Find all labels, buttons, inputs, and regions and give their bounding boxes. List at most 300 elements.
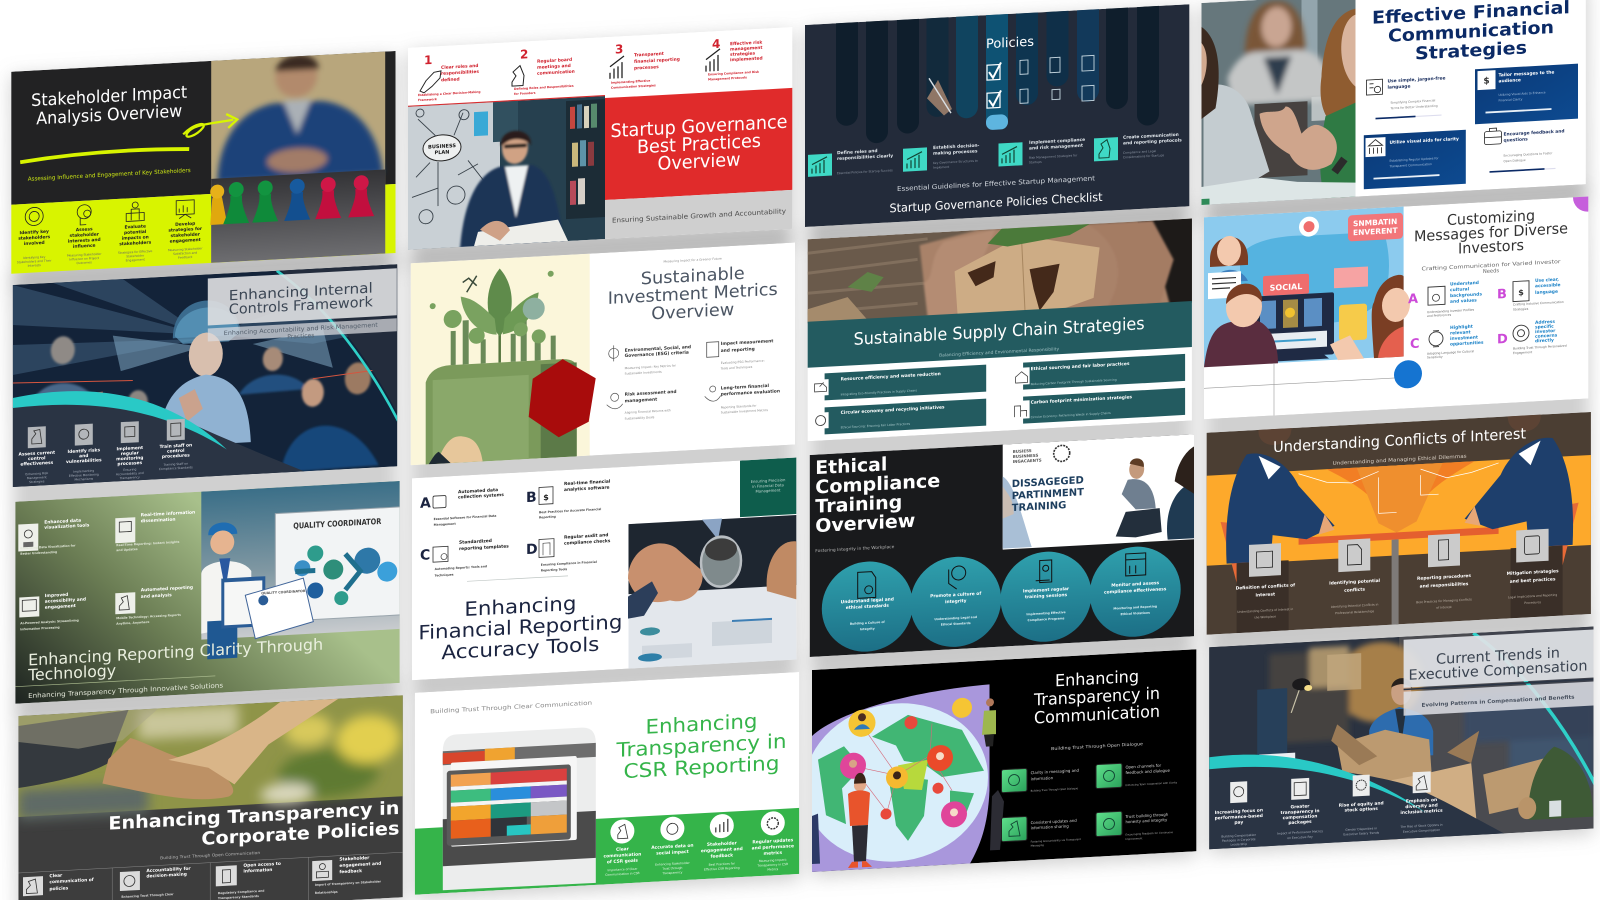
photo: founder with business plan: PLAN	[435, 149, 449, 156]
item: evaluate impacts	[118, 201, 153, 263]
item: identifying: conflicts	[1344, 587, 1365, 594]
item A	[1408, 280, 1482, 319]
item: open access: information	[243, 867, 272, 875]
panel: Startup Governance	[408, 27, 793, 252]
item: data visualization: Enhanced data	[44, 518, 81, 526]
item: monitoring: Accountability and	[116, 471, 144, 476]
item: mitigation: Procedures	[1524, 600, 1541, 605]
item: assess interests: Influence on Project	[69, 256, 100, 262]
item: trust building	[1096, 808, 1174, 843]
title: Training	[815, 492, 902, 518]
item: accessibility: Improved	[45, 592, 68, 599]
item C	[420, 537, 509, 578]
item: automated reporting: and analysis	[141, 592, 172, 600]
panel: Effective Financial Communication	[1202, 0, 1586, 205]
item: assess controls: Management	[27, 475, 47, 480]
item: stakeholder engagement: Effective CSR Reporting	[704, 866, 740, 872]
item: stakeholder engagement	[312, 854, 382, 895]
card: visual aids: Transparent Communication	[1389, 162, 1432, 168]
item: risk assessment: Risk assessment and	[625, 389, 677, 398]
title: Communication	[1034, 702, 1160, 728]
title: Understanding Conflicts of Interest	[1273, 425, 1526, 456]
item: consistent updates: Consistent updates and	[1031, 818, 1077, 825]
item: real-time information	[115, 509, 195, 552]
item: performance-based pay	[1215, 780, 1263, 848]
item: plain language	[1366, 75, 1445, 120]
item: develop strategies: stakeholder	[171, 231, 201, 239]
illustration: negotiation at an orange table	[1207, 408, 1592, 635]
title: Overview	[815, 511, 915, 537]
photo strips: hand ticking policy checklist	[836, 0, 1159, 145]
item: equity options: Gender Disparities in	[1345, 826, 1377, 832]
title: Enhancing Reporting Clarity Through	[28, 635, 323, 670]
item: reporting procedures: of Interest	[1436, 605, 1453, 610]
title: Enhancing	[464, 592, 576, 621]
item: identifying: Professional Relationships	[1335, 609, 1375, 615]
item C: reporting templates	[459, 543, 509, 552]
circle: legal standards: Building a Culture of	[850, 620, 885, 626]
item: identify risks	[66, 423, 102, 482]
item: transparency in packages: transparency in	[1281, 808, 1319, 816]
item: clarity in messaging: Clarity in messaging and	[1031, 768, 1079, 775]
photo: hands holding earth box	[808, 215, 1193, 335]
item: stakeholder engagement: feedback	[710, 853, 733, 860]
item: ethical sourcing: Ethical sourcing and fair labor practices	[1031, 361, 1130, 372]
item: train staff: Train staff on	[159, 442, 192, 450]
item: ESG	[609, 341, 691, 377]
item: clear communication of CSR goals	[603, 818, 641, 877]
item: definition: Understanding Conflicts of Interest in	[1237, 607, 1293, 614]
item: long-term performance: Sustainable Investment Metrics	[721, 408, 768, 415]
item: trust building: Improvement	[1126, 836, 1142, 841]
item C: Standardized	[459, 538, 492, 546]
grid lines	[1204, 356, 1410, 419]
item: identify key stakeholders: Identifying Key	[23, 255, 46, 260]
item: transparent reporting: processes	[634, 64, 659, 71]
item: compliance	[998, 137, 1085, 167]
subtitle: Ensuring Sustainable Growth and Accountability	[612, 207, 786, 225]
item: develop strategies: Feedback	[178, 255, 193, 260]
panel: Enhancing Transparency in CSR Reporting	[415, 672, 800, 895]
item: clear communication	[23, 871, 94, 896]
item: automated reporting: Automated reporting	[141, 585, 193, 593]
item: consistent updates: information sharing	[1031, 823, 1069, 830]
item: assess controls: Enhancing Risk	[25, 471, 48, 476]
item: automated reporting: Mobile Technology: Accessing Reports	[116, 613, 181, 620]
item: assess interests	[67, 204, 102, 266]
item: real-time information: dissemination	[141, 517, 176, 524]
item: monitoring: processes	[117, 460, 143, 467]
item: assess interests: Measuring Stakeholder	[67, 252, 102, 258]
red hexagon	[529, 357, 596, 439]
item: communication protocols: Considerations for Startups	[1123, 153, 1164, 159]
item: trust building: honesty and integrity	[1126, 817, 1168, 824]
item: monitoring: Ensuring	[123, 467, 136, 472]
item: monitoring: monitoring	[116, 455, 143, 462]
photo: hand with magnifying glass over reports	[628, 514, 798, 669]
item: open access: Open access to	[243, 861, 281, 869]
item: performance-based pay: Packages in Corporate	[1222, 837, 1256, 843]
item: accountability: decision-making	[146, 871, 187, 880]
item: communication protocols: Create communication	[1123, 132, 1179, 141]
item: ethical sourcing	[1014, 354, 1185, 390]
item: impact measurement: and reporting	[721, 346, 755, 354]
item: equity options: Rise of equity and	[1339, 800, 1384, 809]
item: assess controls: Assess current	[19, 450, 55, 458]
illustration: quality coordinator with certificate: QUALITY COORDINATOR	[261, 589, 306, 595]
subtitle: Needs	[1483, 268, 1499, 275]
item: decision-making: Key Governance Structures to	[933, 159, 978, 165]
panel: Stakeholder Impact Analysis	[11, 49, 396, 275]
item B: language	[1535, 289, 1558, 296]
photo: speaker at department training: TRAINING	[1012, 500, 1066, 514]
subtitle: Crafting Communication for Varied Investor	[1422, 259, 1562, 273]
item: transparency in packages: packages	[1288, 819, 1312, 826]
item: identifying: Identifying potential	[1329, 578, 1381, 587]
title panel	[1404, 630, 1594, 716]
item: risk assessment: management	[625, 397, 657, 404]
item C: investment	[1450, 335, 1478, 342]
item: risk assessment: Sustainability Goals	[625, 415, 655, 421]
item: risk management: Management Protocols	[708, 75, 747, 81]
title panel: Enhancing Internal	[229, 281, 373, 304]
item: clarity in messaging	[1002, 766, 1079, 794]
title panel: Controls Framework	[229, 294, 374, 318]
title: Analysis Overview	[36, 101, 182, 129]
illustration: quality coordinator with certificate: QUALITY COORDINATOR	[293, 517, 381, 531]
item: define roles: responsibilities clearly	[837, 153, 893, 162]
item: performance-based pay: pay	[1234, 820, 1243, 826]
item: reporting procedures: Best Practices for Managing Conflicts	[1416, 597, 1472, 604]
card: tailor messages: Tailor messages to the	[1498, 69, 1554, 78]
illustration: tablet dashboard	[443, 727, 596, 891]
brush stroke and arrow	[20, 113, 237, 162]
item: regular updates: Metrics	[767, 867, 779, 872]
item: decision-making: Establish decision-	[933, 143, 980, 151]
item: identify risks: Identify risks	[68, 447, 100, 455]
item: evaluate impacts: stakeholders	[119, 240, 152, 247]
item D: Reporting Tools	[541, 567, 567, 573]
item: circular economy: Circular economy and recycling initiatives	[841, 404, 945, 416]
title band: Sustainable Supply Chain Strategies	[854, 314, 1145, 350]
item B: B	[526, 490, 537, 506]
card: visual aids	[1364, 130, 1466, 189]
item D: D	[526, 542, 538, 558]
item D: directly	[1535, 337, 1554, 344]
title: Enhancing	[1055, 667, 1139, 690]
item: evaluate impacts: Stakeholder	[126, 253, 145, 258]
circle: monitor effectiveness: Monitoring and Reporting	[1113, 604, 1157, 611]
title: Startup Governance Policies Checklist	[890, 190, 1103, 215]
item: equity options: stock options	[1345, 806, 1378, 814]
item: develop strategies: Develop	[175, 221, 195, 228]
item D: Engagement	[1513, 350, 1533, 355]
item: accurate data: Accurate data on	[651, 843, 694, 851]
item: diversity metrics: Executive Compensation	[1403, 828, 1440, 834]
corner note: Ensuring Precision	[751, 477, 786, 484]
item: stakeholder engagement: engagement and	[339, 861, 381, 869]
item: accurate data	[651, 816, 694, 876]
item: resource efficiency: Resource efficiency and waste reduction	[841, 371, 941, 383]
item: identifying: Identifying Potential Conflicts in	[1331, 602, 1378, 609]
circle: culture of integrity: integrity	[945, 598, 967, 605]
panel: Customizing Messages	[1204, 181, 1600, 419]
item: develop strategies: engagement	[170, 237, 201, 245]
title: Strategies	[1415, 38, 1527, 64]
item: evaluate impacts: Strategies for Effective	[118, 249, 153, 255]
item: risk management: strategies	[730, 51, 756, 58]
item: risk management	[706, 35, 763, 82]
item: plain language: language	[1388, 83, 1410, 91]
item: regular updates: and performance	[752, 843, 794, 852]
photo: speaker at department training: BUSIESS	[1013, 448, 1032, 454]
item: performance-based pay: Increasing focus on	[1215, 807, 1263, 816]
item: resource efficiency: Integrating Eco-Friendly Practices in Supply Chains	[841, 388, 917, 397]
item: encourage feedback: questions	[1504, 136, 1528, 144]
illustration: connected people on a globe	[804, 684, 1004, 872]
illustration: social media team: ENVERENT	[1353, 226, 1398, 237]
item: data visualization: Better Understanding	[20, 550, 57, 556]
photo: speaker at department training	[1003, 434, 1195, 550]
item: consistent updates: Messaging	[1031, 843, 1044, 848]
title panel: Evolving Patterns in Compensation and Benefits	[1421, 695, 1574, 709]
item: monitoring: Implement	[116, 445, 143, 452]
item: trust building: Trust building through	[1125, 812, 1169, 819]
item: regular updates: metrics	[764, 850, 782, 857]
card: tailor messages	[1475, 64, 1578, 124]
item: accurate data: social impact	[656, 849, 689, 857]
title: Overview	[651, 300, 734, 324]
title panel: Current Trends in	[1436, 645, 1560, 668]
item: assess interests: influence	[73, 243, 96, 250]
item: accountability: Enhancing Trust Through Clear	[121, 892, 174, 899]
item A: backgrounds	[1450, 291, 1482, 299]
item: stakeholder engagement: feedback	[339, 868, 362, 875]
title: Best Practices	[637, 131, 761, 158]
item B: B	[1497, 287, 1507, 302]
item: clear roles	[418, 55, 480, 102]
panel: Sustainable Supply Chain	[808, 215, 1193, 441]
item: define roles	[808, 147, 893, 177]
item B: $	[543, 493, 549, 502]
item: assess controls	[19, 426, 55, 485]
item: transparent reporting	[610, 39, 680, 90]
item: definition	[1236, 542, 1295, 621]
item B: Use clear,	[1535, 277, 1559, 284]
card: visual aids: Establishing Regular Updates for	[1390, 156, 1439, 163]
subtitle: Fostering Integrity in the Workplace	[815, 544, 895, 553]
item: monitoring: Transparency	[119, 475, 140, 480]
item: clear communication of CSR goals: Clear	[616, 846, 630, 853]
item: compliance: Startups	[1029, 160, 1042, 165]
item: diversity metrics: The Rise of Stock Options in	[1399, 823, 1443, 829]
item: ethical sourcing: Reducing Carbon Footprint Through Sustainable Sourcing	[1031, 378, 1117, 386]
item: data visualization: Enhancing Data Visualization for	[20, 543, 76, 550]
accent rule	[15, 676, 215, 687]
item C: Techniques	[435, 573, 454, 578]
item: reporting procedures	[1416, 533, 1472, 611]
item: mitigation: Legal Implications and Reporting	[1508, 593, 1557, 599]
photo: speaker at department training: DISSAGEGED	[1012, 475, 1084, 490]
item A: and values	[1450, 297, 1477, 305]
item D: concerns	[1535, 333, 1558, 340]
photo: speaker at department training: BUSINNESS	[1013, 453, 1038, 459]
item D: D	[1497, 332, 1508, 347]
photo: executive among moving boxes	[1209, 627, 1594, 851]
title panel: Executive Compensation	[1408, 658, 1587, 684]
item: clear roles: 1	[424, 53, 432, 67]
item D: investor	[1535, 328, 1556, 335]
title: Investment Metrics	[608, 280, 778, 309]
item: decision-making: making processes	[933, 148, 978, 157]
subtitle: Building Trust Through Open Dialogue	[1051, 741, 1143, 751]
circle: culture of integrity	[910, 554, 1001, 649]
item: board meetings: Defining Roles and Responsibilities	[514, 84, 574, 91]
item: equity options: Executive Salary Trends	[1343, 831, 1379, 837]
item: consistent updates	[1002, 813, 1081, 849]
item: identifying	[1329, 538, 1381, 616]
item: train staff: procedures	[162, 452, 190, 460]
item: risk management: management	[730, 45, 763, 53]
title: Compliance	[815, 471, 940, 498]
panel: Current Trends in Executive Compensation	[1209, 626, 1595, 853]
item: assess controls: control	[28, 455, 46, 462]
item: accessibility	[19, 591, 86, 631]
circle: regular training: training sessions	[1025, 592, 1067, 600]
item: performance-based pay: Building Compensation	[1221, 833, 1256, 839]
item: develop strategies	[168, 199, 203, 260]
title: Overview	[658, 149, 741, 175]
title: Communication	[1388, 18, 1554, 47]
item: accessibility: accessibility and	[45, 596, 86, 605]
item: communication protocols: and reporting protocols	[1123, 137, 1182, 147]
item D: Address	[1535, 319, 1555, 326]
circle: regular training: Compliance Programs	[1028, 616, 1065, 622]
item: board meetings	[512, 50, 574, 95]
item D	[1497, 318, 1567, 356]
title: Technology	[27, 661, 116, 685]
item: transparent reporting: Transparent	[634, 51, 664, 58]
item: performance-based pay: performance-based	[1215, 813, 1263, 822]
blue circle	[1394, 360, 1422, 389]
subtitle: Building Trust Through Open Communication	[160, 850, 261, 860]
circle: legal standards: ethical standards	[846, 603, 889, 611]
item: accurate data: Trust through	[661, 866, 682, 871]
title: Sustainable	[641, 264, 745, 289]
item: impact measurement: Evaluating ESG Performance:	[721, 359, 765, 365]
title: Enhancing Transparency in	[108, 798, 399, 835]
item: accessibility: engagement	[45, 603, 76, 611]
item A: collection systems	[458, 492, 504, 501]
item: assess interests: interests and	[68, 237, 101, 245]
item: definition: interest	[1256, 592, 1275, 599]
item: identify risks: vulnerabilities	[66, 457, 102, 465]
item: long-term performance	[705, 382, 780, 415]
item: accurate data: Transparency	[661, 870, 683, 875]
panel: Startup Governance Policies Checklist	[805, 0, 1190, 227]
item: real-time information: and Updates	[116, 547, 138, 552]
item: circular economy	[814, 399, 986, 435]
item: accessibility: AI-Powered Analysis: Streamlining	[20, 618, 79, 625]
circle: culture of integrity: Ethical Standards	[941, 621, 971, 627]
item: carbon footprint	[1013, 388, 1185, 424]
item: transparency in packages	[1277, 777, 1323, 841]
item: stakeholder engagement: Import of Transparency on Stakeholder	[315, 879, 382, 887]
item: develop strategies: Satisfaction and	[173, 251, 197, 256]
item: stakeholder engagement: engagement and	[701, 846, 743, 854]
item: long-term performance: Reporting Standards for	[721, 404, 757, 410]
item: board meetings: meetings and	[537, 63, 571, 71]
title: Ethical	[815, 454, 887, 479]
title: Messages for Diverse	[1414, 220, 1568, 245]
item B	[1497, 276, 1564, 312]
item: plain language: Use simple, jargon-free	[1388, 75, 1445, 84]
circle: legal standards: Understand legal and	[841, 596, 894, 605]
photo: founder with business plan: BUSINESS	[428, 143, 456, 151]
item: mitigation	[1507, 528, 1559, 606]
item C: Automating Reports: Tools and	[435, 564, 487, 571]
item: identify risks: Implementing	[73, 469, 94, 474]
item: clear roles: responsibilities	[441, 69, 479, 77]
item: train staff: control	[167, 448, 185, 455]
subtitle: Assessing Influence and Engagement of Key Stakeholders	[28, 168, 191, 183]
item C: Adapting Language for Cultural	[1427, 349, 1474, 356]
item: carbon footprint: Circular Economy: Rethinking Waste in Supply Chains	[1031, 411, 1111, 419]
card: tailor messages: Financial Clarity	[1498, 97, 1523, 102]
item: communication protocols	[1094, 132, 1182, 161]
item: communication protocols: Compliance and Legal	[1123, 149, 1156, 155]
title: Investors	[1458, 237, 1524, 258]
item A: A	[1408, 292, 1418, 307]
item: impact measurement: Tools and Techniques	[720, 365, 753, 371]
item: encourage feedback	[1484, 124, 1565, 173]
item C: relevant	[1450, 329, 1471, 337]
title: Transparency in	[1033, 684, 1160, 710]
item C: Highlight	[1450, 324, 1473, 331]
item: stakeholder engagement: Best Practices for	[709, 861, 736, 867]
item: clear communication: communication of	[49, 877, 94, 885]
item: diversity metrics: Emphasis on	[1406, 797, 1437, 805]
item: automated reporting	[115, 585, 193, 626]
title: Startup Governance	[611, 112, 788, 142]
item: decision-making: Implement	[933, 165, 950, 170]
item: equity options	[1339, 774, 1384, 837]
item: define roles: Define roles and	[837, 148, 878, 156]
item: clear communication: Clear	[49, 873, 63, 879]
item: identify key stakeholders	[17, 206, 52, 268]
title panel: Practices	[287, 332, 314, 341]
item: clear communication of CSR goals: communication	[603, 851, 641, 860]
item: consistent updates: Fostering Accountability via Transparent	[1031, 837, 1081, 844]
card: visual aids: Utilize visual aids for clarity	[1390, 136, 1459, 146]
item: real-time information: Real-time information	[141, 509, 195, 518]
photo: futuristic control room	[13, 263, 413, 487]
item C: opportunities	[1450, 340, 1484, 348]
photo: speaker at department training: INGACAENTS	[1013, 457, 1042, 464]
item: evaluate impacts: Engagement	[126, 257, 146, 263]
dark panels and teal swooshes	[1209, 626, 1595, 853]
item: risk assessment: Aligning Financial Returns with	[625, 408, 671, 415]
item: assess controls: Strategies	[29, 479, 45, 484]
subtitle: Enhancing Transparency Through Innovative Solutions	[28, 681, 224, 700]
panel: Enhancing Reporting Clarity	[15, 481, 400, 704]
item A: Management	[434, 522, 456, 527]
corner note: Management	[756, 487, 781, 494]
item: stakeholder engagement: Stakeholder	[339, 855, 370, 863]
item: monitoring: regular	[121, 450, 140, 457]
item: board meetings: for Founders	[514, 91, 536, 96]
item: resource efficiency	[814, 365, 986, 401]
